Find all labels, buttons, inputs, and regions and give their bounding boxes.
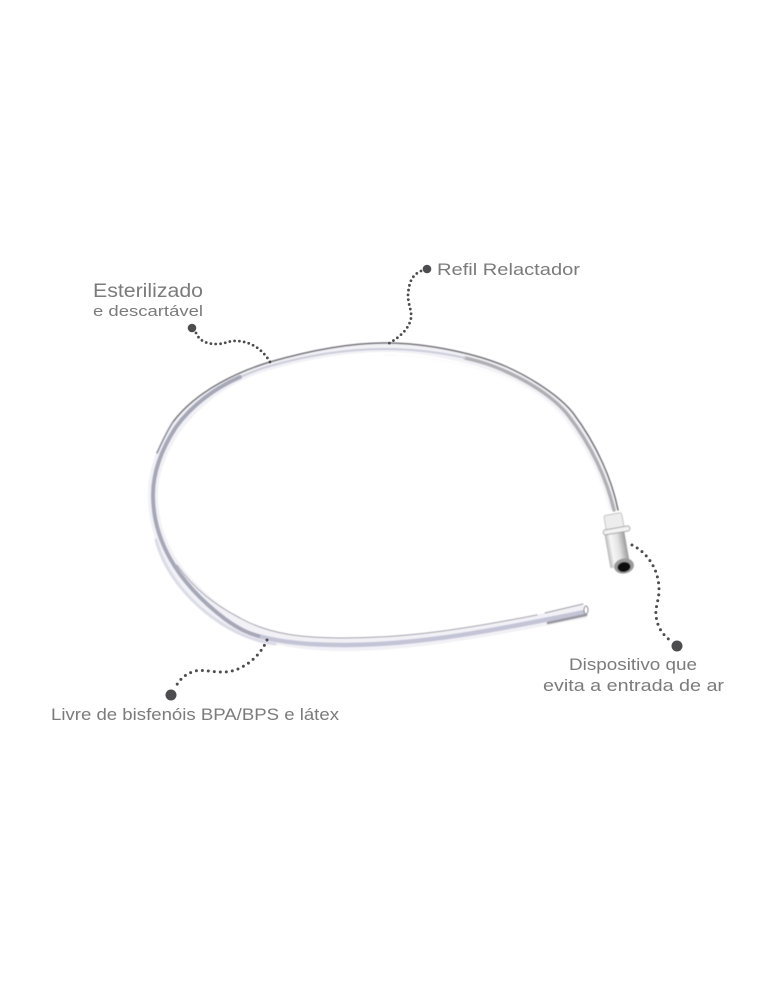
label: Refil Relactador: Refil Relactador [437, 261, 581, 279]
label: Livre de bisfenóis: Livre de bisfenóis BPA/BPS e látex [51, 706, 340, 724]
label: e descartável: e descartável [93, 303, 203, 320]
tube [148, 343, 618, 651]
label: Esterilizado: Esterilizado [93, 281, 203, 302]
label: evita a entrada de ar: evita a entrada de ar [543, 677, 725, 695]
connector [603, 513, 635, 575]
callout line: Esterilizado [188, 324, 270, 362]
callout line: Livre de bisfenóis [166, 640, 267, 700]
callout line: Refil Relactador [388, 265, 431, 344]
label: Dispositivo que: Dispositivo que [569, 656, 697, 674]
callout line: Dispositivo [632, 545, 682, 652]
